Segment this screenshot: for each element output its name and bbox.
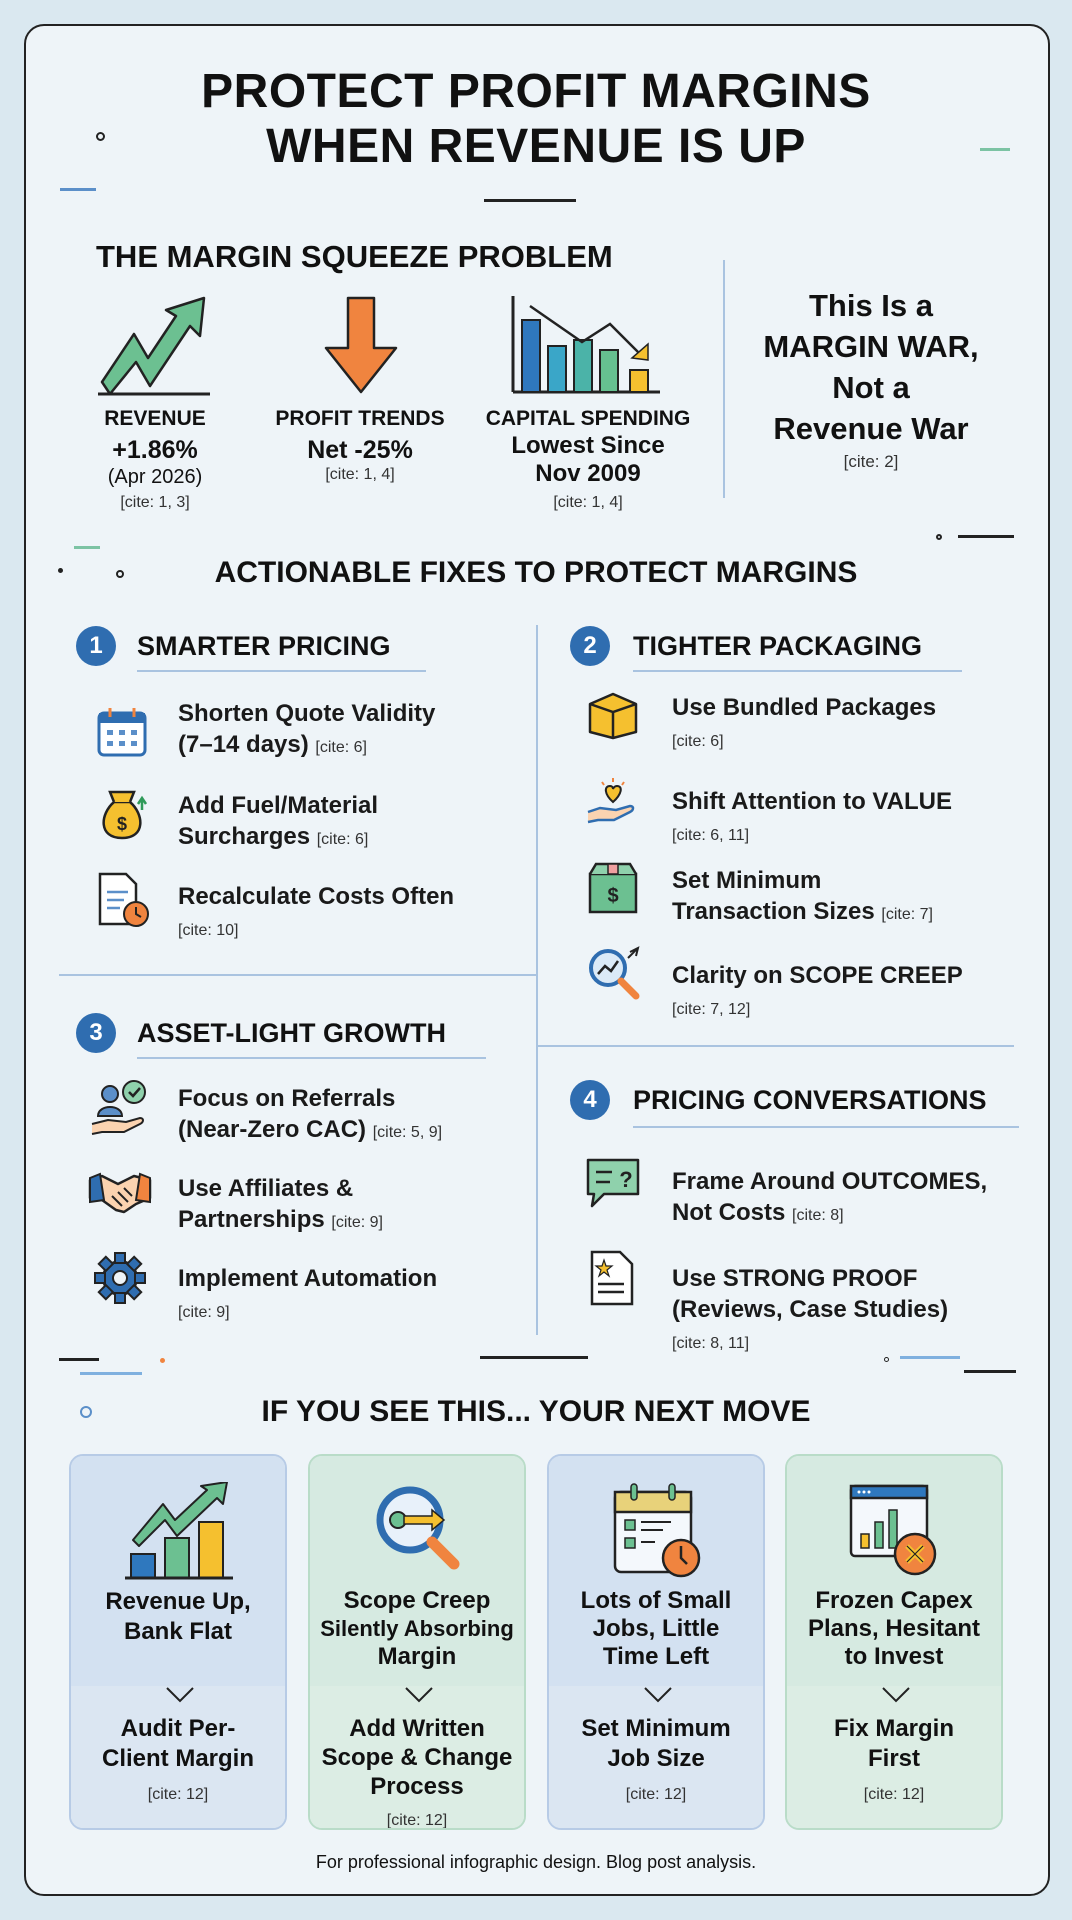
card: scope creep: Silently Absorbing [320,1616,514,1641]
card: revenue up bank flat: Audit Per- [121,1715,235,1742]
stat: revenue: +1.86% [112,436,198,464]
card: scope creep: Add Written [349,1715,485,1742]
panel: smarter pricing: SMARTER PRICING [137,631,391,661]
card: frozen capex: First [868,1745,920,1772]
stat: capital spending: Nov 2009 [535,460,641,487]
card: small jobs: Lots of Small [581,1587,731,1614]
icon: calendar clock [614,1483,700,1578]
panel: pricing conversations: 4 [583,1086,597,1113]
callout: margin war: Not a [832,370,910,405]
panel: pricing conversations: Frame Around OUTCOMES, [672,1168,987,1195]
stat: profit: PROFIT TRENDS [275,407,445,430]
icon: referral person [92,1080,146,1135]
panel: tighter packaging [570,626,963,1018]
card: frozen capex: [cite: 12] [864,1786,924,1803]
icon: box dollar: $ [607,885,619,907]
stat: revenue: REVENUE [104,407,206,430]
panel: asset-light growth: Use Affiliates & [178,1175,353,1202]
card: frozen capex: Plans, Hesitant [808,1615,980,1642]
icon: growth bars [125,1482,233,1580]
icon: bar chart down [512,296,660,394]
panel: asset-light growth: [cite: 9] [178,1304,230,1321]
panel: tighter packaging: [cite: 7, 12] [672,1001,750,1018]
icon: handshake [88,1172,152,1214]
panel: asset-light growth: (Near-Zero CAC) [cite: 5, 9] [178,1116,442,1143]
icon: money bag: $ [117,814,127,834]
icon: calendar [98,708,146,756]
stat: capital spending: [cite: 1, 4] [553,494,623,511]
panel: tighter packaging: Set Minimum [672,867,821,894]
heading: actionable fixes: ACTIONABLE FIXES TO PROTECT MARGINS [215,556,857,589]
arrow: chevron [882,1687,910,1702]
icon: up arrow [98,296,210,396]
stat: profit [275,296,445,483]
card: revenue up bank flat: Bank Flat [124,1618,232,1645]
arrow: chevron [405,1687,433,1702]
callout: margin war: MARGIN WAR, [763,329,979,364]
panel: asset-light growth: Implement Automation [178,1265,437,1292]
panel: pricing conversations: [cite: 8, 11] [672,1335,749,1352]
arrow: chevron [166,1687,194,1702]
panel: tighter packaging: [cite: 6, 11] [672,827,749,844]
stat: capital spending: Lowest Since [511,432,665,459]
icon: speech question: ? [619,1167,633,1192]
panel: pricing conversations: PRICING CONVERSATIONS [633,1085,987,1115]
footer: For professional infographic design. Blog post analysis. [316,1852,756,1872]
card: small jobs: Set Minimum [581,1715,731,1742]
title: WHEN REVENUE IS UP [266,120,806,173]
card: frozen capex: to Invest [845,1643,943,1670]
panel: tighter packaging: TIGHTER PACKAGING [633,631,922,661]
title: PROTECT PROFIT MARGINS [201,65,871,118]
stat: capital spending [486,296,690,511]
panel: asset-light growth: Focus on Referrals [178,1085,395,1112]
panel: tighter packaging: [cite: 6] [672,733,724,750]
panel: tighter packaging: Use Bundled Packages [672,694,936,721]
panel: tighter packaging: Shift Attention to VALUE [672,788,952,815]
callout: margin war: This Is a [809,288,933,323]
panel: pricing conversations [570,1080,1019,1352]
panel: asset-light growth: Partnerships [cite: 9] [178,1206,383,1233]
stat: revenue: (Apr 2026) [108,466,202,488]
icon: down arrow [324,296,398,394]
icon: speech question [586,1158,640,1208]
card: frozen capex [785,1454,1003,1830]
stat: revenue [98,296,210,511]
card: small jobs: [cite: 12] [626,1786,686,1803]
panel: smarter pricing: Surcharges [cite: 6] [178,823,368,850]
icon: magnifier target [376,1486,460,1570]
icon: hand heart [588,778,634,824]
panel: asset-light growth: 3 [89,1019,103,1046]
heading: margin squeeze: THE MARGIN SQUEEZE PROBLEM [96,239,613,274]
card: scope creep: Margin [378,1643,456,1670]
arrow: chevron [644,1687,672,1702]
icon: gear [94,1252,146,1304]
stat: profit: [cite: 1, 4] [325,466,395,483]
panel: tighter packaging: 2 [583,632,597,659]
card: scope creep: [cite: 12] [387,1812,447,1829]
card: scope creep: Process [370,1773,464,1800]
icon: window chart x [850,1484,936,1576]
callout: margin war: Revenue War [773,411,969,446]
panel: smarter pricing: (7–14 days) [cite: 6] [178,731,367,758]
panel: asset-light growth [76,1013,486,1321]
stat: capital spending: CAPITAL SPENDING [486,407,690,430]
panel: pricing conversations: (Reviews, Case Studies) [672,1296,948,1323]
card: frozen capex: Frozen Capex [815,1587,973,1614]
icon: document clock [98,872,149,927]
panel: smarter pricing: Shorten Quote Validity [178,700,435,727]
panel: smarter pricing: 1 [89,632,103,659]
card: scope creep: Scope & Change [322,1744,512,1771]
panel: tighter packaging: Clarity on SCOPE CREEP [672,962,963,989]
panel: smarter pricing: Recalculate Costs Often [178,883,454,910]
callout: margin war [763,288,979,471]
icon: box [588,692,638,740]
heading: next move: IF YOU SEE THIS... YOUR NEXT MOVE [262,1395,810,1428]
panel: pricing conversations: Use STRONG PROOF [672,1265,917,1292]
card: scope creep [308,1454,526,1830]
icon: magnifier [589,946,640,1000]
card: small jobs [547,1454,765,1830]
icon: document star [590,1250,634,1306]
icon: box dollar [588,862,638,914]
icon: money bag [102,790,147,840]
card: revenue up bank flat [69,1454,287,1830]
title [201,65,871,173]
card: revenue up bank flat: [cite: 12] [148,1786,208,1803]
panel: smarter pricing: Add Fuel/Material [178,792,378,819]
card: revenue up bank flat: Client Margin [102,1745,254,1772]
card: small jobs: Jobs, Little [593,1615,719,1642]
card: frozen capex: Fix Margin [834,1715,954,1742]
stat: revenue: [cite: 1, 3] [120,494,190,511]
card: scope creep: Scope Creep [344,1587,490,1614]
card: revenue up bank flat: Revenue Up, [105,1588,251,1615]
callout: margin war: [cite: 2] [844,452,898,471]
panel: pricing conversations: Not Costs [cite: 8] [672,1199,844,1226]
panel: asset-light growth: ASSET-LIGHT GROWTH [137,1018,446,1048]
panel: smarter pricing: [cite: 10] [178,922,238,939]
card: small jobs: Job Size [607,1745,705,1772]
panel: smarter pricing [76,626,454,939]
panel: tighter packaging: Transaction Sizes [cite: 7] [672,898,933,925]
stat: profit: Net -25% [307,436,413,464]
card: small jobs: Time Left [603,1643,709,1670]
